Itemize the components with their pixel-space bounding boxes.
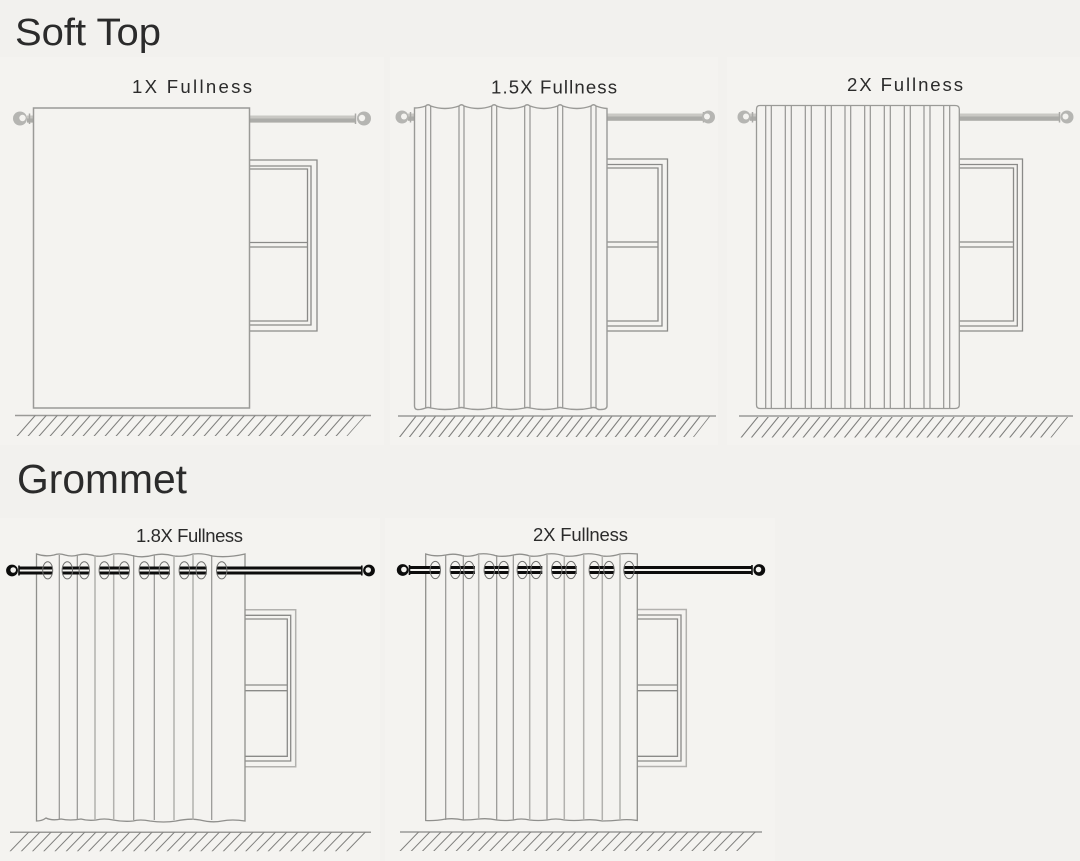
icon: curtain rod <box>396 110 715 124</box>
icon: curtain rod <box>738 110 1074 124</box>
icon: floor hatching <box>739 416 1073 427</box>
icon: window <box>245 610 296 767</box>
panel: soft top 1X fullness <box>13 76 371 426</box>
panel: grommet 1.8X fullness <box>6 525 375 842</box>
icon: grommet curtain <box>426 554 637 821</box>
icon: pleated curtain <box>756 106 959 408</box>
icon: grommet rod <box>6 565 375 576</box>
label: 1.5X Fullness: 1.5X Fullness <box>491 76 617 98</box>
label: 1X Fullness: 1X Fullness <box>132 76 252 97</box>
icon: grommet curtain <box>36 554 245 822</box>
panel: soft top 1.5X fullness <box>396 76 716 427</box>
label: 2X Fullness: 2X Fullness <box>847 74 963 95</box>
icon: floor hatching <box>400 832 762 842</box>
icon: window <box>959 159 1022 331</box>
icon: curtain rod <box>13 112 371 126</box>
icon: grommet rings <box>430 561 634 579</box>
icon: flat curtain <box>34 108 250 408</box>
icon: window <box>249 160 317 331</box>
panel: soft top 2X fullness <box>738 74 1074 427</box>
icon: pleated curtain <box>414 105 607 410</box>
icon: floor hatching <box>398 416 716 427</box>
icon: grommet rod <box>397 564 765 576</box>
icon: grommet rings <box>43 562 227 579</box>
heading: Soft Top: Soft Top <box>15 12 161 54</box>
panel: grommet 2X fullness <box>397 524 765 842</box>
label: 2X Fullness: 2X Fullness <box>533 524 628 545</box>
label: 1.8X Fullness: 1.8X Fullness <box>136 525 243 546</box>
heading: Grommet: Grommet <box>17 456 187 502</box>
icon: window <box>637 610 686 766</box>
icon: floor hatching <box>10 832 371 842</box>
icon: floor hatching <box>15 416 371 426</box>
icon: window <box>607 159 668 331</box>
